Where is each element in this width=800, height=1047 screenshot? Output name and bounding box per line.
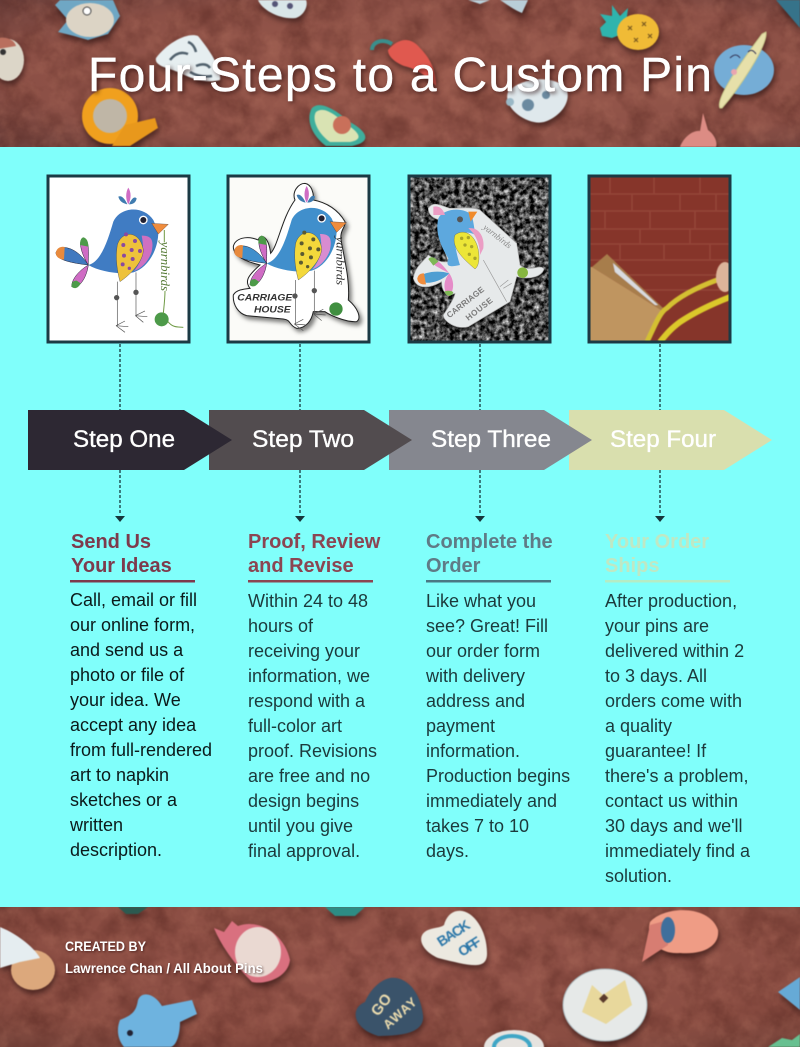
text block: step two description: until you give xyxy=(248,816,353,836)
heading: proof, review and revise xyxy=(248,531,381,582)
pin: heart go away: AWAY xyxy=(380,994,420,1032)
pin: pineapple xyxy=(600,5,659,50)
text block: step two description: respond with a xyxy=(248,691,366,711)
arrow: step one xyxy=(28,410,232,470)
text block: step four description: 30 days and we'll xyxy=(605,816,743,836)
connector arrow: step one down xyxy=(115,470,125,522)
text block: step one description: and send us a xyxy=(70,640,184,660)
text block: step one description: Call, email or fill xyxy=(70,590,197,610)
text block: step four description: After production, xyxy=(605,591,737,611)
arrow: step three xyxy=(389,410,592,470)
text block: step four description: guarantee! If xyxy=(605,741,707,761)
text block: step one description: from full-rendered xyxy=(70,740,212,760)
text block: step three description: days. xyxy=(426,841,469,861)
pin: right edge blue xyxy=(778,977,800,1010)
connector arrow: step four down xyxy=(655,470,665,522)
connector: step three image to arrow xyxy=(479,344,481,410)
heading: complete the order: Complete the xyxy=(426,531,553,553)
pin: top white pin xyxy=(258,0,307,18)
text block: step two description: final approval. xyxy=(248,841,360,861)
text block: step three description: payment xyxy=(426,716,495,736)
text block: step one description: accept any idea xyxy=(70,715,197,735)
pin: heart back off: OFF xyxy=(455,933,484,960)
text block: step three description: information. xyxy=(426,741,520,761)
pin: planet xyxy=(714,32,774,108)
pin: chili pepper xyxy=(372,40,436,86)
arrow: step three: Step Three xyxy=(431,426,551,453)
arrow: step four: Step Four xyxy=(610,426,716,453)
panel: step one text xyxy=(69,531,212,860)
image: step two pin proof: HOUSE xyxy=(254,305,292,315)
arrow: step four xyxy=(569,410,772,470)
panel: step two text xyxy=(248,531,381,861)
text block: step two description xyxy=(248,591,377,861)
image: step one bird sketch xyxy=(48,176,189,342)
text block: step two description: design begins xyxy=(248,791,359,811)
text block: step four description: immediately find a xyxy=(605,841,751,861)
pin: orange hood xyxy=(82,88,158,146)
text block: step three description xyxy=(425,591,570,861)
image: step three finished pin: CARRIAGE xyxy=(444,284,486,320)
text block: step four description: solution. xyxy=(605,866,672,886)
pin: blue bird xyxy=(118,994,197,1047)
pin: swirl candy xyxy=(484,1030,544,1047)
pin: sloth xyxy=(642,910,718,962)
arrow: step two xyxy=(209,410,412,470)
pin: panda xyxy=(506,79,568,123)
panel: header photo background xyxy=(0,0,800,147)
text block: step four description: to 3 days. All xyxy=(605,666,707,686)
text block: step four description: orders come with xyxy=(605,691,742,711)
text block: step four description: your pins are xyxy=(605,616,709,636)
text block: step three description: see? Great! Fill xyxy=(426,616,548,636)
image: step two pin proof xyxy=(228,176,369,342)
text block: step four description xyxy=(605,591,751,886)
heading: complete the order: Order xyxy=(426,555,481,577)
text block: step three description: Like what you xyxy=(426,591,536,611)
pin: right edge green xyxy=(768,1034,800,1047)
pin: heart back off xyxy=(421,911,487,965)
heading: proof, review and revise: Proof, Review xyxy=(248,531,381,553)
text block: step two description: hours of xyxy=(248,616,314,636)
pin: top right pin xyxy=(776,0,800,28)
text block: step one description xyxy=(69,590,212,860)
image: step three finished pin: yarnbirds xyxy=(481,221,514,251)
heading: send us your ideas: Your Ideas xyxy=(71,555,172,577)
image: step three finished pin: HOUSE xyxy=(463,295,495,323)
footer credit: CREATED BY xyxy=(65,938,147,954)
panel: step four text xyxy=(605,531,751,886)
pin: top centre sliver xyxy=(468,0,528,13)
connector: step two image to arrow xyxy=(299,344,301,410)
text block: step two description: are free and no xyxy=(248,766,370,786)
text block: step three description: with delivery xyxy=(425,666,525,686)
pin: round face on left xyxy=(0,38,24,81)
pin: top slivers xyxy=(118,907,365,916)
pin: pink bird xyxy=(680,113,717,147)
tail feathers xyxy=(417,257,453,297)
pin: heart back off: BACK xyxy=(434,916,473,950)
heading: your order ships: Your Order xyxy=(605,531,709,553)
text block: step two description: proof. Revisions xyxy=(248,741,377,761)
text block: step one description: sketches or a xyxy=(70,790,178,810)
pin: avocado xyxy=(309,105,365,146)
image: step four parcel delivery xyxy=(589,176,734,342)
connector arrow: step three down xyxy=(475,470,485,522)
heading: your order ships: Ships xyxy=(605,555,659,577)
text block: step one description: your idea. We xyxy=(70,690,181,710)
arrow: step two: Step Two xyxy=(252,426,354,453)
text block: step four description: a quality xyxy=(605,716,672,736)
heading: send us your ideas xyxy=(70,531,195,582)
title: Four-Steps to a Custom Pin xyxy=(88,49,712,102)
footer credit: Lawrence Chan / All About Pins xyxy=(65,960,263,976)
heading: your order ships xyxy=(605,531,730,582)
image: step three finished pin xyxy=(409,176,550,342)
pin: strawberry xyxy=(214,921,290,983)
pin: mask xyxy=(156,35,220,81)
panel: cyan content area xyxy=(0,147,800,907)
text block: step two description: full-color art xyxy=(248,716,342,736)
pin: heart go away xyxy=(356,978,423,1036)
text block: step two description: information, we xyxy=(248,666,370,686)
heading: send us your ideas: Send Us xyxy=(71,531,151,553)
text block: step two description: Within 24 to 48 xyxy=(248,591,368,611)
text block: step three description: Production begins xyxy=(426,766,570,786)
text block: step three description: our order form xyxy=(426,641,540,661)
text block: step four description: delivered within 2 xyxy=(605,641,744,661)
text block: step four description: contact us within xyxy=(605,791,738,811)
footer credit xyxy=(65,938,263,976)
text block: step three description: address and xyxy=(426,691,525,711)
heading: complete the order xyxy=(426,531,553,582)
pin: heart go away: GO xyxy=(368,990,396,1019)
text block: step one description: written xyxy=(69,815,123,835)
pin: wing and swirl xyxy=(0,927,55,990)
panel: step three text xyxy=(425,531,570,861)
pin: face with blue hair xyxy=(55,0,120,40)
text block: step one description: description. xyxy=(70,840,162,860)
arrow: step one: Step One xyxy=(73,426,175,453)
text block: step one description: art to napkin xyxy=(70,765,169,785)
text block: step one description: photo or file of xyxy=(70,665,185,685)
panel: footer photo background xyxy=(0,907,800,1047)
connector arrow: step two down xyxy=(295,470,305,522)
pin: queen medallion xyxy=(563,969,647,1041)
image: step one bird sketch: yarnbirds xyxy=(158,240,172,291)
image: step two pin proof: yarnbirds xyxy=(334,236,348,285)
text block: step four description: there's a problem, xyxy=(605,766,749,786)
text block: step one description: our online form, xyxy=(70,615,195,635)
heading: proof, review and revise: and Revise xyxy=(248,555,354,577)
text block: step two description: receiving your xyxy=(248,641,360,661)
connector: step one image to arrow xyxy=(119,344,121,410)
connector: step four image to arrow xyxy=(659,344,661,410)
text block: step three description: immediately and xyxy=(426,791,557,811)
image: step two pin proof: CARRIAGE xyxy=(237,293,293,303)
text block: step three description: takes 7 to 10 xyxy=(426,816,529,836)
